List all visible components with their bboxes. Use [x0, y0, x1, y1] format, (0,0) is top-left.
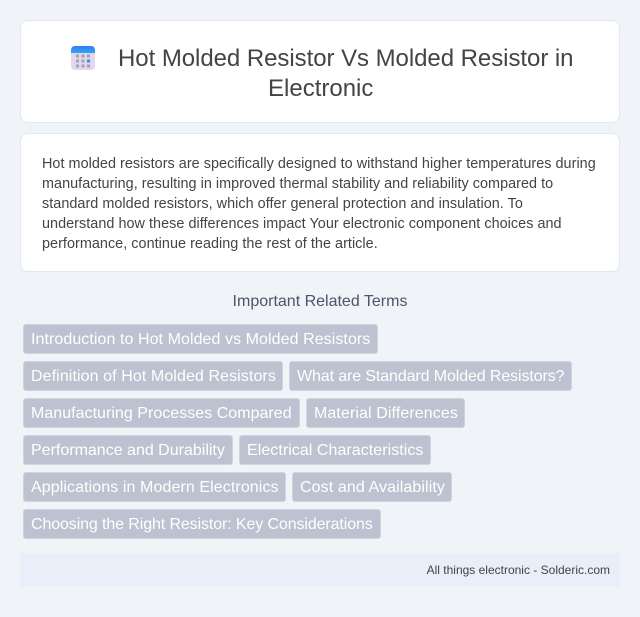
title: Electronic [268, 75, 373, 102]
tag: Applications in Modern Electronics [31, 479, 279, 496]
footer [20, 553, 620, 586]
title: Hot Molded Resistor Vs Molded Resistor in [118, 45, 573, 72]
footer text: All things electronic - Solderic.com [427, 563, 610, 577]
text block: summary: Hot molded resistors are specifically designed to withstand higher temperatures during [42, 156, 596, 172]
tag: What are Standard Molded Resistors? [297, 368, 564, 385]
panel: header [20, 20, 620, 123]
tag list [23, 324, 572, 539]
tag [239, 435, 431, 465]
tag: Definition of Hot Molded Resistors [31, 368, 276, 385]
tag [23, 509, 381, 539]
tag: Performance and Durability [31, 442, 225, 459]
tag: Electrical Characteristics [247, 442, 423, 459]
tag [23, 361, 283, 391]
tag: Cost and Availability [300, 479, 445, 496]
tag [306, 398, 465, 428]
tag [23, 398, 300, 428]
tag [289, 361, 572, 391]
tag [23, 324, 378, 354]
text block: summary: standard molded resistors, which offer general protection and insulation. To [42, 196, 523, 212]
tag: Manufacturing Processes Compared [31, 405, 292, 422]
title [118, 45, 573, 102]
tag [23, 472, 286, 502]
tag: Material Differences [314, 405, 458, 422]
text block: summary: manufacturing, resulting in improved thermal stability and reliability compared to [42, 176, 553, 192]
icon: calendar [71, 46, 95, 70]
tag: Introduction to Hot Molded vs Molded Resistors [31, 331, 370, 348]
text block: summary: understand how these differences impact Your electronic component choices and [42, 216, 562, 232]
text block: summary [42, 156, 596, 252]
tag: Choosing the Right Resistor: Key Considerations [31, 516, 373, 533]
tag [292, 472, 452, 502]
heading: related terms: Important Related Terms [233, 293, 407, 310]
panel: summary [20, 133, 620, 272]
text block: summary: performance, continue reading the rest of the article. [42, 236, 378, 252]
tag [23, 435, 233, 465]
